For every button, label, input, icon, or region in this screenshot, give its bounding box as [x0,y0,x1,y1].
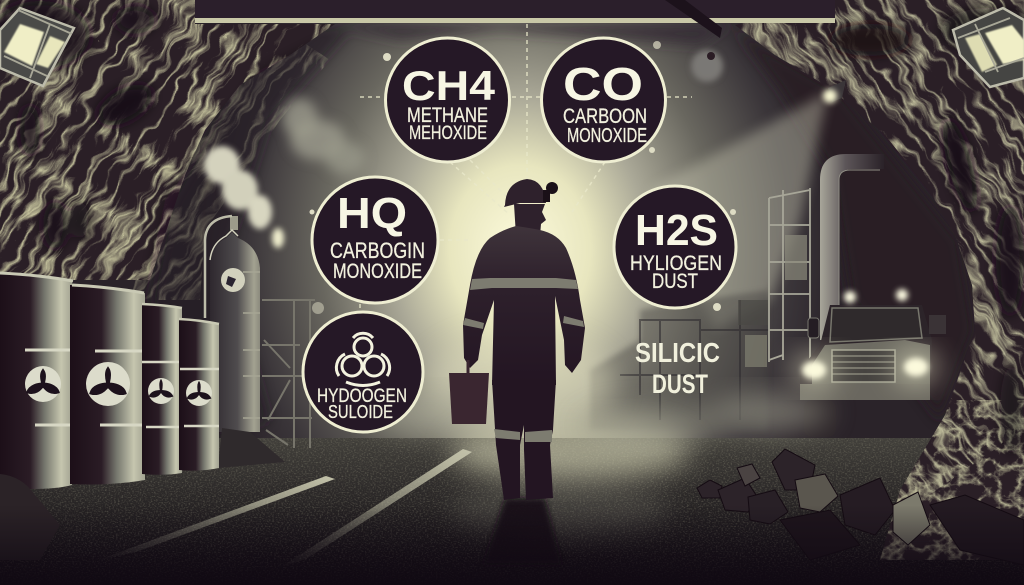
ground dust cloud [370,392,830,441]
badge: H2S hyliogen dust: H2S [635,206,718,255]
badge: CO carbon monoxide [542,38,666,162]
truck grille [832,350,895,382]
top beam [195,0,835,38]
badge: H2S hyliogen dust [614,186,736,308]
badge: HQ carbogin monoxide: CARBOGIN [330,238,425,263]
badge: CO carbon monoxide: CARBOON [563,105,647,128]
miner silhouette [449,179,585,500]
dark shadow areas behind the walls [150,24,975,440]
badge: HQ carbogin monoxide [312,177,438,303]
badge: H2S hyliogen dust: DUST [652,270,698,293]
truck wheel [804,400,836,437]
dashed connector lines [360,24,692,312]
hazard barrels [0,273,219,489]
left top lantern [0,8,74,86]
worker shadow on the floor [483,498,562,565]
reflective stripes [463,278,584,442]
small glowing dots [310,41,736,314]
icon: biohazard [336,333,390,386]
label: silicic dust: SILICIC [635,337,720,368]
badge: HQ carbogin monoxide: MONOXIDE [333,260,422,283]
miner legs [492,380,556,500]
label: silicic dust: DUST [652,369,708,399]
hanging lamp [691,50,723,82]
label: silicic dust [635,337,720,399]
truck [792,289,946,437]
drifting smoke clouds [204,98,365,248]
badge: H2S hyliogen dust: HYLIOGEN [630,252,722,275]
rock pile, bottom right [697,449,1024,565]
truck hood [812,340,930,384]
truck lights [802,289,928,379]
left scaffold tower [262,300,315,448]
ventilation pipe [820,154,884,340]
barrel 3 [142,304,182,475]
badge: CO carbon monoxide: CO [563,58,643,110]
barrel 1 [0,273,73,489]
bottom darkening [0,505,1024,585]
badge: biohazard hydoogen suloide [303,312,423,432]
badge: CH4 methane: MEHOXIDE [409,123,487,144]
bucket [449,373,489,424]
badge: CH4 methane [386,38,510,162]
truck cab and windscreen [800,305,932,385]
miner head and neck [514,204,546,236]
ceiling spot lamp [823,80,846,103]
right top lantern [953,8,1024,87]
spotlight beam, right [650,92,828,330]
rails [98,449,472,567]
background building structures [590,290,770,430]
badge: CO carbon monoxide: MONOXIDE [567,125,647,147]
rubble behind tank [218,428,285,468]
barrel 4 [179,319,219,471]
truck light glow [792,349,938,388]
miner torso and arms [463,226,585,385]
left rock wall [0,0,334,280]
badge: biohazard hydoogen suloide: SULOIDE [328,402,393,422]
gas cylinder tank [205,216,260,432]
dim rock behind smoke [133,44,328,300]
floor [0,418,1024,585]
barrel 2 [70,285,145,484]
badge: CH4 methane: METHANE [407,104,488,127]
lower glow around the legs [425,335,615,435]
right rock wall [736,0,1024,560]
badge: CH4 methane: CH4 [402,62,496,109]
rubble, bottom left [0,474,60,560]
truck bumper [800,384,930,400]
right scaffold tower [769,188,810,370]
truck mirrors [808,315,946,338]
miner helmet and lamp [504,179,546,207]
badge: biohazard hydoogen suloide: HYDOOGEN [317,386,407,407]
badge: HQ carbogin monoxide: HQ [337,189,407,238]
